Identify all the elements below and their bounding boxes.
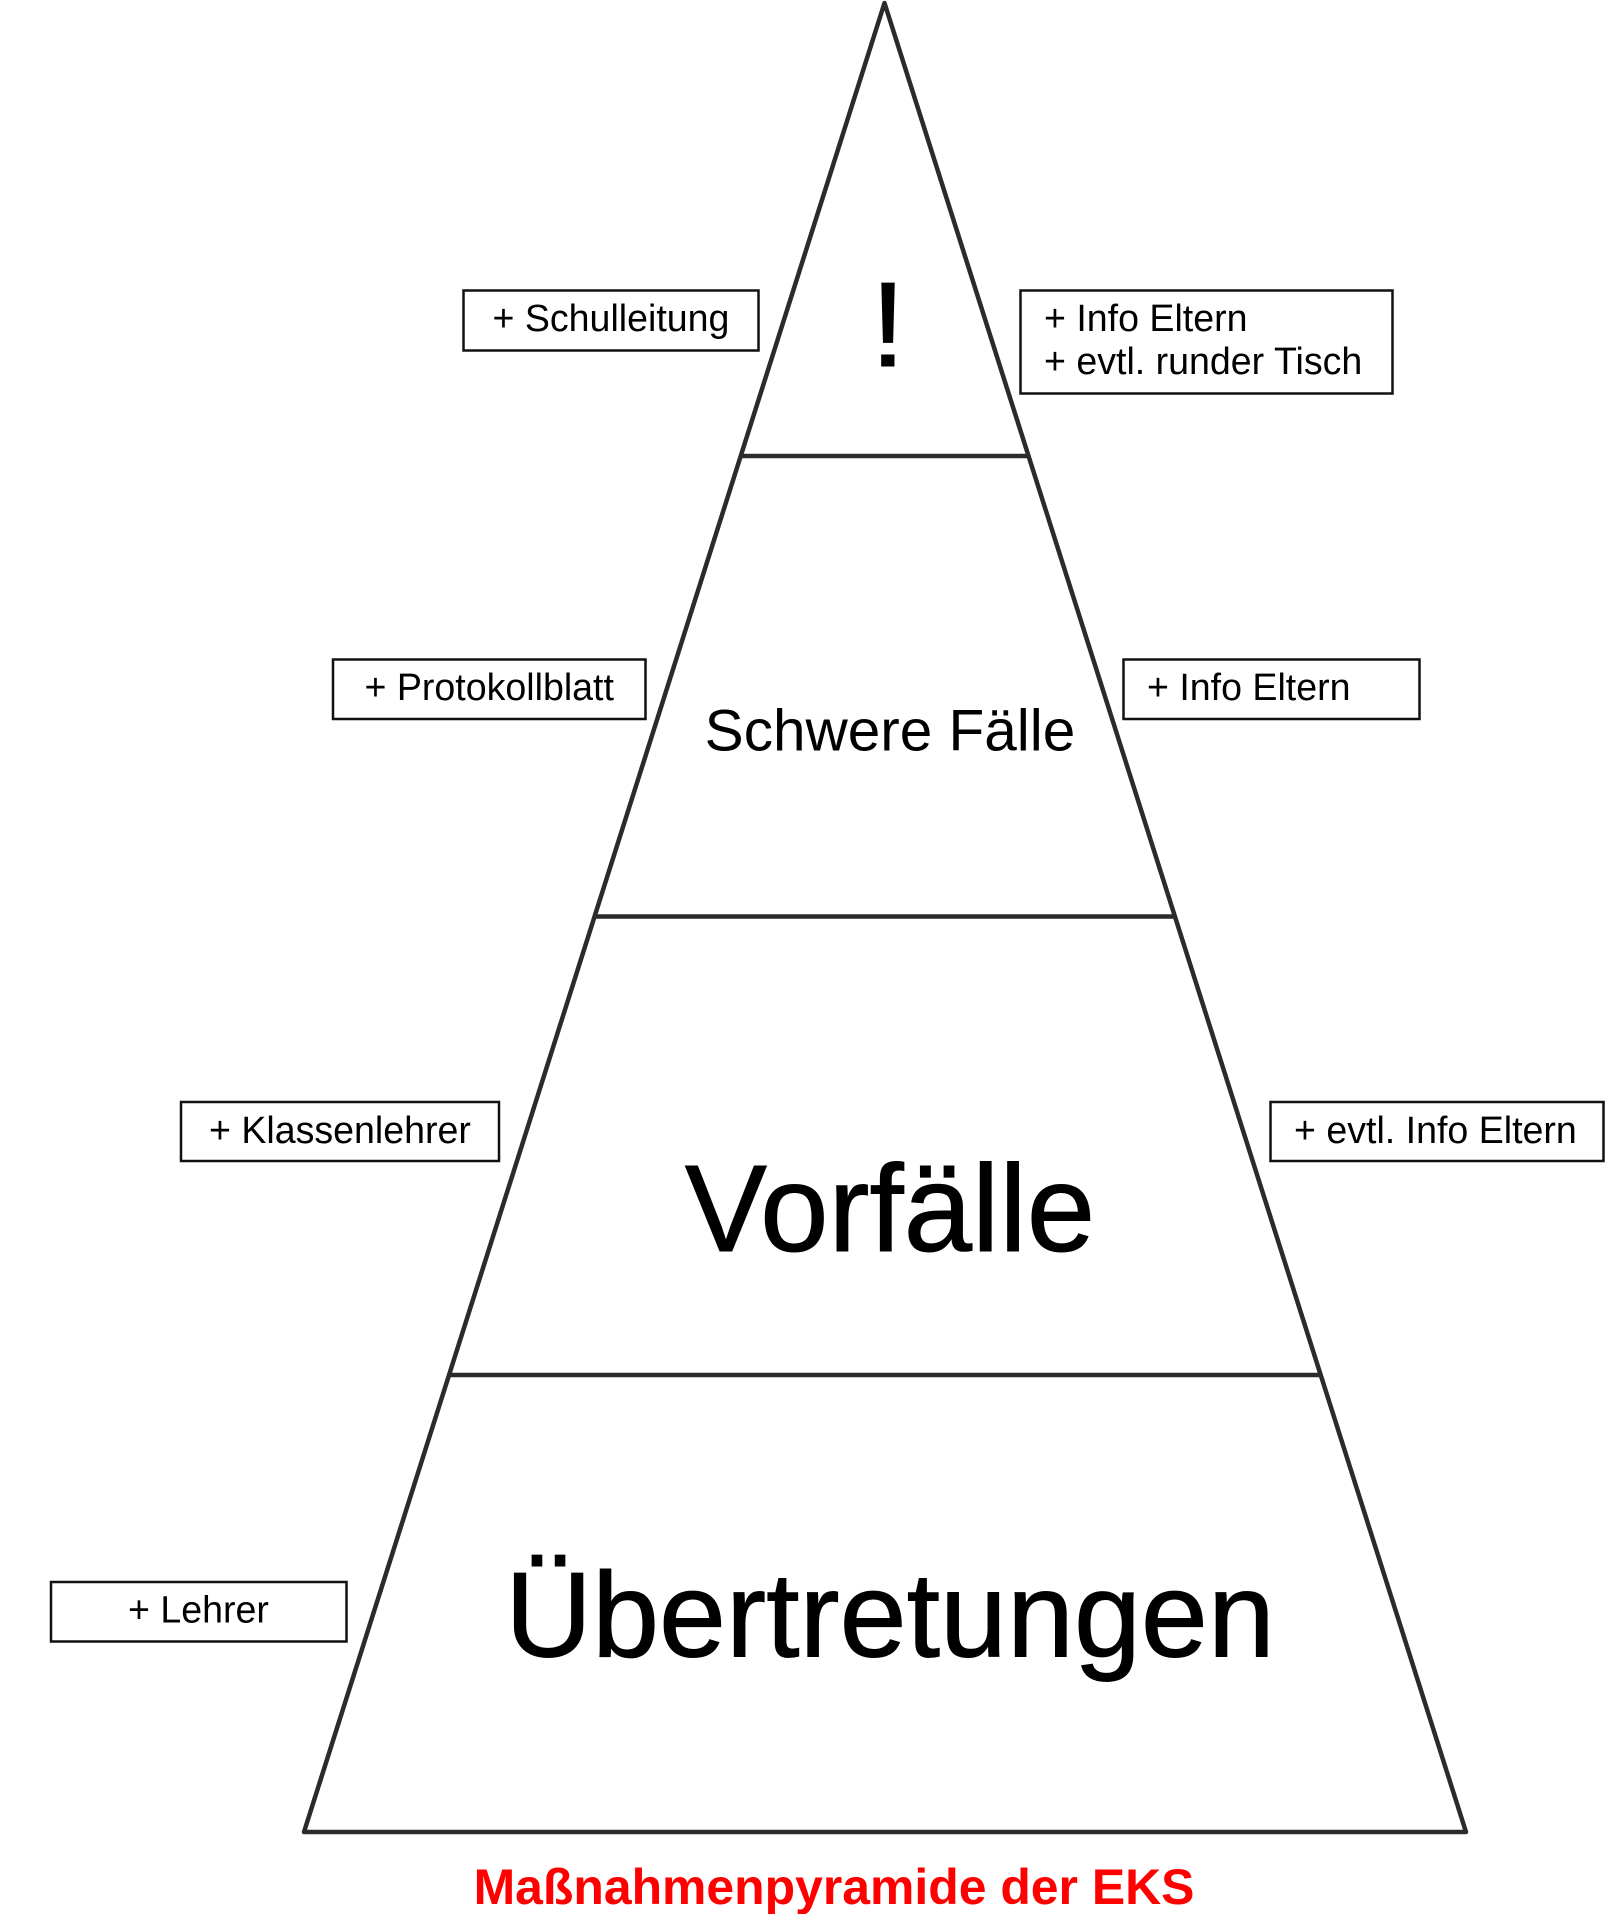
tier label: Schwere Fälle: Schwere Fälle: [705, 698, 1075, 764]
pyramid with tier dividers: [304, 3, 1466, 1832]
callout: Info Eltern, runder Tisch: + evtl. runder Tisch: [1044, 340, 1362, 382]
callout: Protokollblatt: [333, 660, 646, 719]
callout: Info Eltern: + Info Eltern: [1147, 666, 1351, 708]
callout: Protokollblatt: + Protokollblatt: [364, 666, 614, 708]
tier label: Vorfälle: Vorfälle: [685, 1141, 1095, 1278]
callout: evtl. Info Eltern: + evtl. Info Eltern: [1294, 1109, 1577, 1151]
callout: Schulleitung: + Schulleitung: [492, 297, 729, 339]
callout: Schulleitung: [464, 290, 758, 350]
tier label: Übertretungen: Übertretungen: [505, 1548, 1275, 1682]
callout: Klassenlehrer: [181, 1102, 499, 1161]
callout: Info Eltern: [1124, 660, 1420, 719]
callout: Info Eltern, runder Tisch: + Info Eltern: [1044, 297, 1248, 339]
callout: Klassenlehrer: + Klassenlehrer: [209, 1109, 471, 1151]
callout: Lehrer: [51, 1582, 346, 1642]
tier label: exclamation mark: !: [869, 256, 907, 392]
callout: evtl. Info Eltern: [1270, 1102, 1604, 1161]
callout: Lehrer: + Lehrer: [128, 1588, 269, 1630]
callout: Info Eltern, runder Tisch: [1020, 290, 1392, 394]
title: Maßnahmenpyramide der EKS: [474, 1859, 1194, 1914]
